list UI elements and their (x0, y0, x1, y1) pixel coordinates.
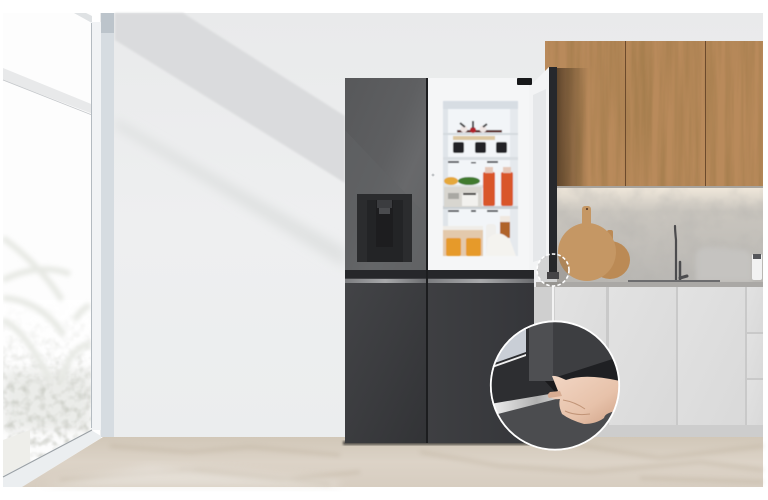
refrigerator compartment (443, 101, 518, 256)
open door corner (529, 320, 554, 381)
open door inner panel (529, 67, 549, 270)
hand (548, 376, 622, 424)
open door edge (549, 67, 557, 275)
refrigerator (343, 67, 557, 445)
green vegetables (443, 177, 483, 188)
white panel in lens (496, 329, 526, 362)
juice bottles (483, 167, 513, 206)
inner white panel (428, 78, 529, 270)
tan tray (453, 136, 495, 140)
bottom drawer food (443, 226, 483, 256)
lens background (492, 322, 618, 404)
door sensor dot (432, 174, 434, 176)
magnified lens: hand lifting hinge (488, 320, 622, 452)
hinge part (545, 381, 558, 392)
silver strip (494, 394, 556, 414)
floor (22, 437, 763, 487)
soap bottle (752, 254, 762, 280)
cutting boards (558, 206, 630, 281)
lower right door (428, 278, 534, 443)
wall with sunlight shadows (100, 13, 763, 437)
water and ice dispenser (357, 194, 412, 262)
dark jars (453, 142, 507, 153)
fridge base shadow (343, 441, 537, 445)
center door seam (426, 78, 428, 443)
storage boxes (444, 187, 482, 207)
faucet (675, 226, 687, 280)
upper wood cabinets (545, 41, 763, 188)
lower door in lens (498, 399, 612, 449)
small dashed circle highlight on hinge (537, 254, 569, 286)
center gap band (345, 270, 534, 278)
dessert plate (457, 121, 502, 133)
window with palm trees (3, 13, 101, 487)
concrete backsplash (557, 188, 763, 283)
countertop and sink (536, 280, 763, 287)
door right face (554, 322, 612, 376)
top door handle (517, 78, 532, 85)
shelf clips (448, 161, 498, 212)
lower left door (345, 278, 426, 443)
milk jugs (486, 216, 516, 256)
upper left door (345, 78, 426, 270)
connector line (552, 286, 554, 321)
lower white cabinets (534, 287, 763, 437)
shelves (443, 133, 518, 209)
